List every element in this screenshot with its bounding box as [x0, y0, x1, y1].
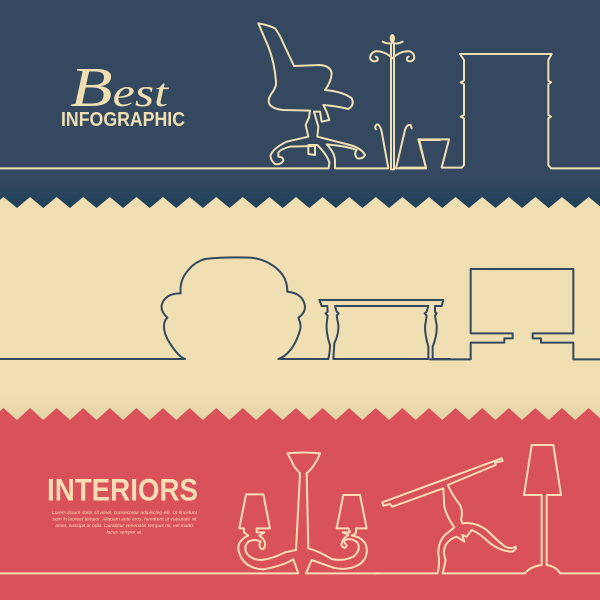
icon: waste bin and desk line art — [400, 54, 600, 168]
panel: red band with zigzag top edge — [0, 408, 600, 600]
icon: armchair line art — [0, 257, 328, 359]
icon: office chair line art — [0, 23, 388, 168]
text block: lorem ipsum: amet, suscipit at odio. Curabitur venenatis tempus mi, vel mattis — [55, 523, 194, 529]
icon: desk top view line art — [430, 269, 600, 359]
icon: coat rack line art — [370, 34, 440, 169]
panel: navy band — [0, 0, 600, 210]
icon: floor lamp line art — [524, 445, 600, 573]
panel: cream band with zigzag top edge — [0, 197, 600, 425]
text block: lorem ipsum: Lorem ipsum dolor sit amet, consectetur adipiscing elit. Ut tincidunt — [52, 510, 198, 516]
heading: Best: Best — [70, 57, 169, 119]
icon: side table line art — [319, 300, 450, 359]
heading: INTERIORS: INTERIORS — [47, 472, 198, 508]
text block: lorem ipsum: lacus semper at. — [107, 530, 142, 536]
icon: tilted table line art — [375, 458, 525, 573]
heading: INFOGRAPHIC: INFOGRAPHIC — [61, 108, 185, 131]
icon: chandelier line art — [0, 452, 380, 573]
text block: lorem ipsum: sem in laoreet tempor. Aliquam ante eros, hendrerit ut vulputate sit — [53, 516, 197, 522]
text block: lorem ipsum — [52, 510, 198, 536]
